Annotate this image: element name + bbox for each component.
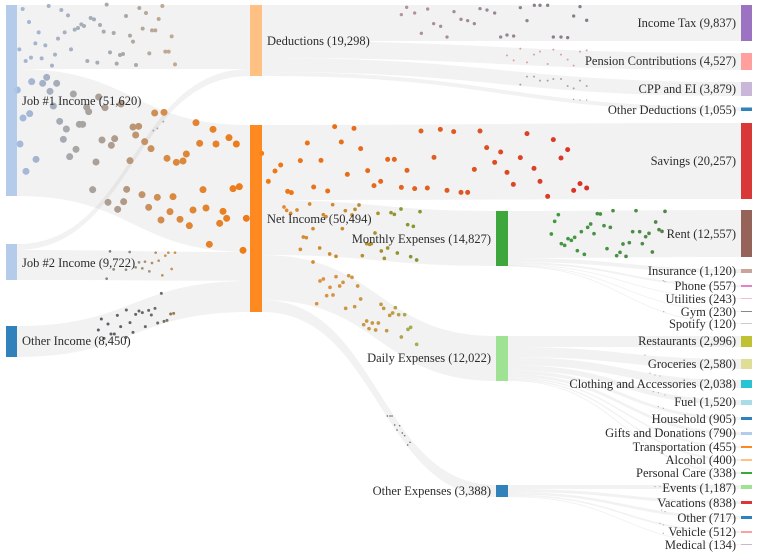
particles: Job #2 to Net Income [105,250,176,280]
link: Other to Medical [508,496,741,545]
node: Monthly Expenses [352,211,508,266]
node: CPP and EI: CPP and EI (3,879) [639,82,736,96]
node: Savings [651,123,752,199]
node: Net Income [250,125,371,312]
node: Other Deductions: Other Deductions (1,055) [608,103,736,117]
link: Daily to Clothing [508,357,741,388]
node: Vacations: Vacations (838) [657,496,736,510]
link: Net Income to Savings [262,123,741,200]
link: Other to Events [508,485,741,489]
node: Medical: Medical (134) [665,538,736,552]
link: Daily to Personal Care [508,380,741,474]
link: Other Income to Net Income [17,281,250,357]
node: Clothing and Accessories: Clothing and Accessories (2,038) [569,377,736,391]
particles: Job #1 to Net Income [14,74,250,254]
particles: Monthly Expenses to Rent [549,209,667,258]
link: Monthly to Rent [508,210,741,258]
link: Daily to Gifts [508,374,741,435]
node: Rent [667,210,752,257]
node: Vehicle: Vehicle (512) [668,525,736,539]
node: Daily Expenses [367,336,508,381]
link: Monthly to Gym [508,265,741,312]
node: Utilities: Utilities (243) [666,292,736,306]
node: Other: Other (717) [677,511,736,525]
node: Deductions: Deductions (19,298) [267,34,370,48]
link: Other to Vehicle [508,494,741,533]
link: Monthly to Utilities [508,264,741,299]
node: Groceries: Groceries (2,580) [648,357,736,371]
link: Net Income to Daily Expenses [262,255,496,381]
link: Other to Vacations [508,489,741,504]
particles: Deductions to Pension Contributions [506,48,588,67]
node: Events: Events (1,187) [662,481,736,495]
link: Daily to Restaurants [508,336,741,347]
link: Deductions to Pension [262,41,741,70]
particles: Job #1 to Deductions [17,3,177,68]
link: Deductions to CPP and EI [262,58,741,96]
node: Daily Expenses: Daily Expenses (12,022) [367,351,491,365]
node: Gym: Gym (230) [681,305,736,319]
node: Alcohol: Alcohol (400) [666,453,736,467]
node: Pension Contributions: Pension Contributions (4,527) [585,54,736,68]
node: Job #2 Income: Job #2 Income (9,722) [22,256,135,270]
node: Phone: Phone (557) [675,279,736,293]
node: Deductions [250,5,370,76]
link: Other to Other [508,492,741,519]
link: Daily to Transportation [508,377,741,448]
node: Personal Care: Personal Care (338) [636,466,736,480]
link: Job #2 to Net Income [17,250,250,281]
particles: small lower-right flows [644,280,666,534]
particles: Net Income to Monthly Expenses [282,202,422,264]
link: Monthly to Insurance [508,258,741,273]
link: Job #1 to Net Income [17,69,250,252]
link: Monthly to Phone [508,262,741,287]
node: Fuel: Fuel (1,520) [674,395,736,409]
link: Job #2 to Deductions [17,69,250,250]
node: Job #1 Income: Job #1 Income (51,620) [22,94,141,108]
node: Monthly Expenses: Monthly Expenses (14,827) [352,232,491,246]
node: Other Income [6,326,131,357]
particles: Net Income to Other Expenses [386,415,411,446]
node: Income Tax: Income Tax (9,837) [637,16,736,30]
node: Insurance: Insurance (1,120) [648,264,736,278]
node: Job #2 Income [6,244,135,280]
link: Deductions to Income Tax [262,5,741,41]
node: Household: Household (905) [652,412,736,426]
node: Other Expenses: Other Expenses (3,388) [373,484,491,498]
node: Transportation: Transportation (455) [633,440,736,454]
link: Daily to Fuel [508,365,741,405]
node: Rent: Rent (12,557) [667,227,736,241]
node: Spotify: Spotify (120) [669,317,736,331]
particles: Deductions to CPP and EI [519,76,588,89]
link: Monthly to Spotify [508,266,741,324]
node: Restaurants: Restaurants (2,996) [638,334,736,348]
particles: Net Income to Savings [259,124,589,199]
link: Net Income to Monthly Expenses [262,200,496,266]
particles: Other Income to Net Income [97,292,175,340]
node: Savings: Savings (20,257) [651,154,736,168]
link: Daily to Household [508,370,741,420]
link: Daily to Groceries [508,347,741,369]
particles: Job #2 to Deductions [152,121,164,132]
node: Income Tax [637,5,752,41]
particles: Net Income to Daily Expenses [315,274,418,346]
link: Job #1 to Deductions [17,5,250,69]
link: Daily to Alcohol [508,378,741,461]
particles: Deductions to Other Deductions [573,99,587,101]
link: Deductions to Other Deductions [262,72,741,111]
node: Job #1 Income [6,5,141,196]
node: Other Income: Other Income (8,450) [22,334,131,348]
link: Net Income to Other Expenses [262,300,496,497]
node: Net Income: Net Income (50,494) [267,212,371,226]
particles: Deductions to Income Tax [400,4,588,39]
node: Gifts and Donations: Gifts and Donations (790) [605,426,736,440]
